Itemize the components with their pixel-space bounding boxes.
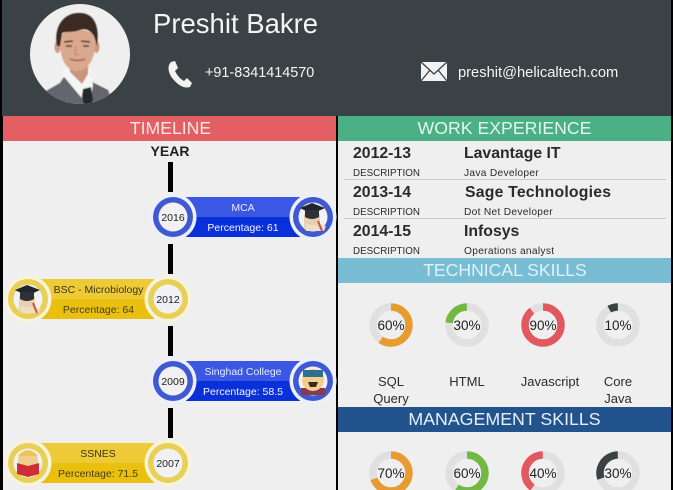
entry 2016 MCA: MCA <box>231 202 255 214</box>
entry 2016 MCA: Percentage: 61 <box>207 222 279 234</box>
job 2014-15: Infosys <box>464 223 520 240</box>
icon: phone <box>169 61 192 88</box>
icon: graduation cap <box>300 203 326 231</box>
donut: HTML 30%: 30% <box>453 318 481 333</box>
skill labels: HTML <box>449 374 485 389</box>
job 2012-13: Lavantage IT <box>464 145 561 162</box>
job 2013-14 <box>353 184 611 218</box>
entry 2016 MCA: 2016 <box>161 212 185 224</box>
donut: 70%: 70% <box>377 466 405 481</box>
entry 2007 SSNES: Percentage: 71.5 <box>58 468 138 480</box>
management skills heading: MANAGEMENT SKILLS <box>408 409 601 429</box>
entry 2012 BSC <box>4 276 192 322</box>
job 2012-13: Java Developer <box>464 168 539 179</box>
panel: technical skills <box>338 258 671 406</box>
panel: timeline <box>3 116 336 490</box>
entry 2007 SSNES: 2007 <box>156 458 180 470</box>
donut: 40% <box>518 448 568 490</box>
email: preshit@helicaltech.com <box>458 65 618 81</box>
skill labels <box>373 374 632 406</box>
work experience heading: WORK EXPERIENCE <box>418 118 592 138</box>
skill labels: Java <box>604 391 632 406</box>
panel: management skills <box>338 407 671 490</box>
technical skills heading: TECHNICAL SKILLS <box>423 260 587 280</box>
entry 2009 Singhad College <box>150 358 336 404</box>
timeline heading <box>3 116 336 141</box>
job 2014-15: 2014-15 <box>353 223 411 240</box>
icon: reader <box>17 450 39 477</box>
skill labels: Query <box>373 391 409 406</box>
donut: Core Java 10% <box>594 301 642 349</box>
job 2012-13: 2012-13 <box>353 145 411 162</box>
donut: SQL Query 60%: 60% <box>377 318 405 333</box>
job 2014-15 <box>353 223 554 257</box>
job 2013-14: DESCRIPTION <box>353 207 420 218</box>
job 2014-15: DESCRIPTION <box>353 246 420 257</box>
entry 2012 BSC: BSC - Microbiology <box>54 284 144 296</box>
name: Preshit Bakre <box>153 8 318 39</box>
technical skills heading <box>338 258 671 283</box>
phone number: +91-8341414570 <box>205 65 314 81</box>
entry 2012 BSC: 2012 <box>156 294 180 306</box>
donut: SQL Query 60% <box>373 307 409 343</box>
donut: 40%: 40% <box>529 466 557 481</box>
icon: envelope <box>421 62 447 81</box>
entry 2009 Singhad College: Percentage: 58.5 <box>203 386 283 398</box>
donut: HTML 30% <box>447 305 487 345</box>
entry 2016 MCA <box>150 194 336 240</box>
skill labels: SQL <box>378 374 404 389</box>
icon: student <box>301 369 325 395</box>
profile photo <box>30 4 130 106</box>
donut: Javascript 90%: 90% <box>529 318 557 333</box>
header band <box>2 0 671 116</box>
donut: 60% <box>449 455 485 490</box>
management skills heading <box>338 407 671 432</box>
timeline heading: TIMELINE <box>130 118 211 138</box>
skill labels: Core <box>604 374 632 389</box>
job 2012-13 <box>353 145 561 179</box>
panel: work experience <box>338 116 671 257</box>
job 2014-15: Operations analyst <box>464 246 554 257</box>
year label: YEAR <box>151 143 189 159</box>
timeline axis <box>168 162 173 438</box>
donut: 60%: 60% <box>453 466 481 481</box>
donut: 30% <box>595 450 641 490</box>
entry 2009 Singhad College: Singhad College <box>204 366 282 378</box>
donut: 70% <box>373 455 409 490</box>
panel: right column background <box>338 141 671 490</box>
donut: 30%: 30% <box>604 466 632 481</box>
job 2013-14: 2013-14 <box>353 184 411 201</box>
icon: graduation cap <box>15 285 41 313</box>
job 2012-13: DESCRIPTION <box>353 168 420 179</box>
donut: Core Java 10%: 10% <box>604 318 632 333</box>
entry 2009 Singhad College: 2009 <box>161 376 185 388</box>
entry 2007 SSNES: SSNES <box>80 448 116 460</box>
entry 2012 BSC: Percentage: 64 <box>63 304 134 316</box>
work experience heading <box>338 116 671 141</box>
donut: Javascript 90% <box>525 307 561 343</box>
job 2013-14: Sage Technologies <box>465 184 611 201</box>
skill labels: Javascript <box>521 374 580 389</box>
job 2013-14: Dot Net Developer <box>464 207 553 218</box>
entry 2007 SSNES <box>4 440 192 486</box>
